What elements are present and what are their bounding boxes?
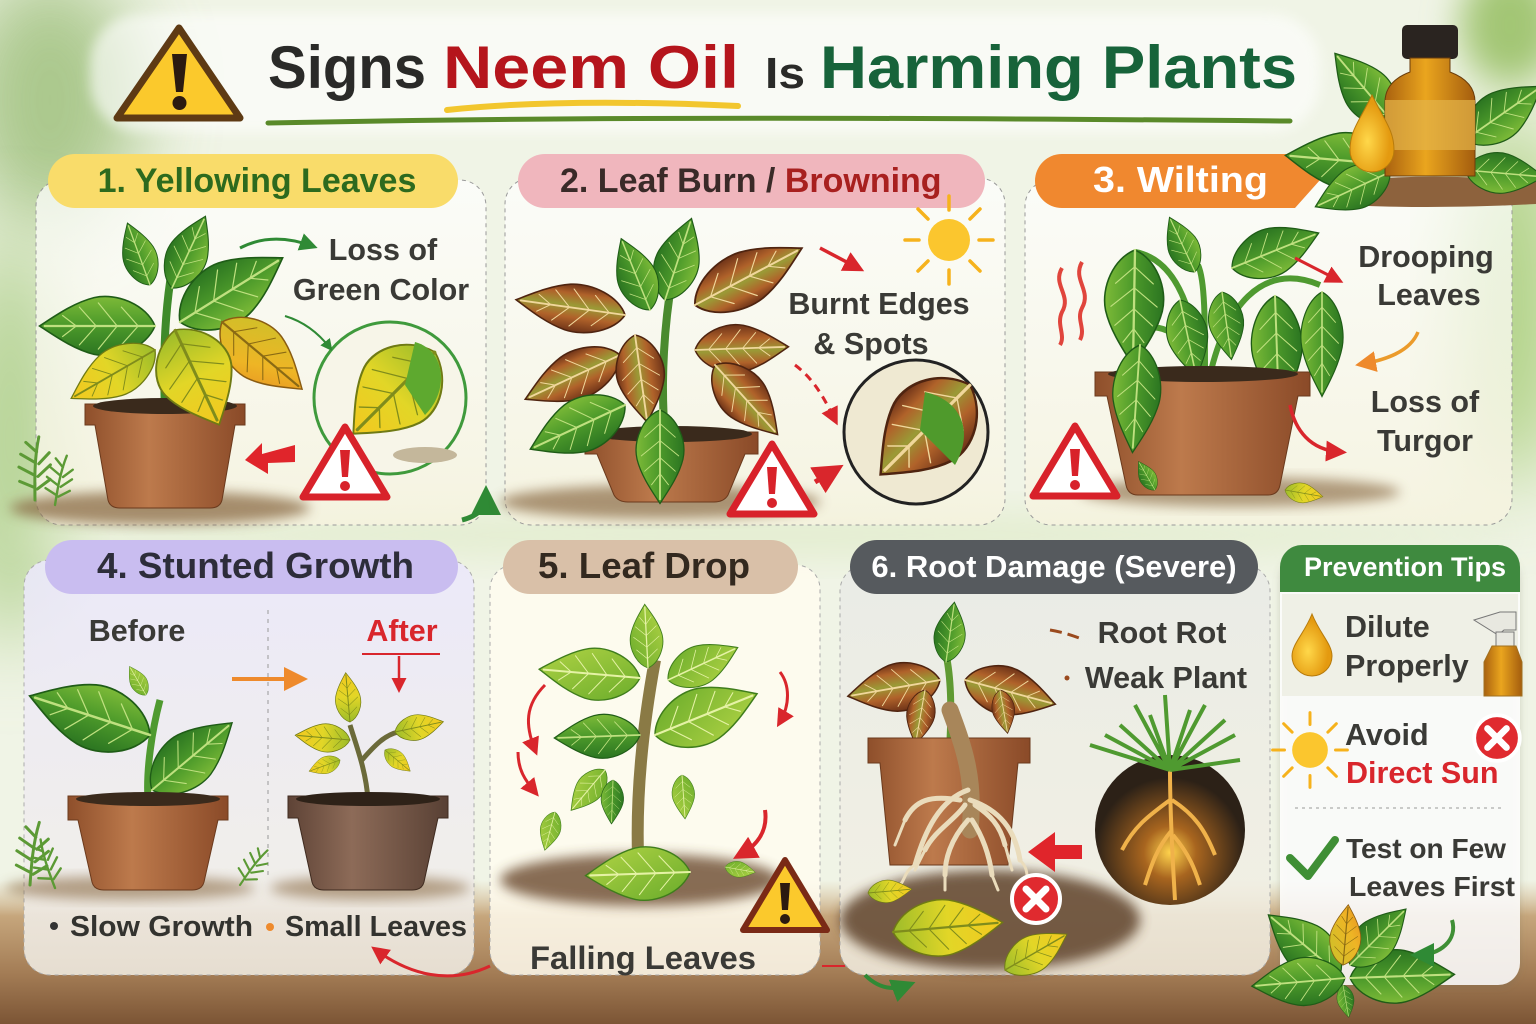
heading	[48, 154, 458, 208]
small plant	[1250, 895, 1455, 1019]
plant in pot	[10, 208, 320, 525]
arrow	[376, 950, 490, 976]
tip: dilute: Properly	[1345, 649, 1469, 683]
icon: spray bottle	[1474, 612, 1522, 696]
title text: Signs	[268, 34, 426, 101]
soil ground	[840, 870, 1140, 970]
plant	[500, 603, 780, 906]
heading	[518, 154, 985, 208]
card	[1280, 555, 1520, 985]
title text: Is	[765, 49, 805, 98]
arrows: falling	[518, 672, 788, 855]
label: Leaves	[1377, 278, 1481, 312]
label	[1358, 240, 1494, 312]
tip: test: Leaves First	[1349, 871, 1515, 902]
card	[24, 560, 474, 975]
panel 4: stunted growth	[5, 540, 490, 976]
heading: 6. Root Damage (Severe)	[871, 549, 1237, 584]
label: Root Rot	[1098, 616, 1226, 650]
icon: warning	[1033, 426, 1117, 496]
icon: wavy lines	[1059, 262, 1085, 345]
tip: test: Test on Few	[1346, 833, 1506, 864]
fallen leaves	[867, 878, 1076, 986]
heading: 1. Yellowing Leaves	[98, 162, 416, 200]
label: Loss of	[1371, 385, 1480, 419]
inset: burnt leaf	[844, 355, 1000, 504]
panel 6: root damage	[840, 540, 1270, 988]
label: Turgor	[1377, 424, 1473, 458]
label	[788, 287, 970, 361]
label: Falling Leaves	[530, 940, 756, 976]
heading	[850, 540, 1258, 594]
panel 5: leaf drop	[490, 540, 845, 976]
tip: avoid sun: Direct Sun	[1346, 756, 1499, 790]
bullet labels: Slow Growth	[70, 911, 253, 943]
arrow	[362, 654, 440, 688]
title text: Harming Plants	[820, 34, 1297, 101]
healthy plant	[5, 662, 271, 900]
icon: neem oil bottle and leaves	[1283, 25, 1536, 226]
label	[1050, 616, 1247, 695]
label: after: After	[366, 614, 438, 648]
icon: x	[1012, 875, 1060, 923]
arrow	[1290, 405, 1340, 452]
tip: dilute: Dilute	[1345, 610, 1430, 644]
title banner	[90, 14, 1320, 132]
bullet labels	[50, 911, 467, 943]
card	[505, 178, 1005, 525]
card	[490, 565, 820, 975]
label	[1371, 385, 1480, 458]
arrow	[820, 248, 858, 268]
arrow	[1028, 832, 1082, 872]
tip: avoid sun	[1273, 713, 1520, 790]
connector	[822, 965, 845, 967]
panel 2: leaf burn	[500, 154, 1005, 525]
heading	[45, 540, 458, 594]
arrow	[232, 677, 300, 681]
icon: warning triangle	[117, 28, 240, 118]
heading: 2. Leaf Burn / Browning	[560, 162, 942, 200]
heading	[503, 540, 798, 594]
bullet labels: Small Leaves	[285, 911, 467, 943]
icon: sun	[905, 196, 993, 284]
heading	[1280, 545, 1520, 592]
arrow: loss of color	[240, 239, 312, 248]
inset: soil circle with roots	[1090, 695, 1245, 905]
plant in pot	[1080, 211, 1400, 507]
arrow	[815, 470, 835, 482]
arrow	[1362, 332, 1418, 364]
card	[1025, 180, 1512, 525]
panel 1: yellowing leaves	[10, 154, 486, 525]
title text	[268, 34, 1297, 101]
tip: avoid sun: Avoid	[1345, 718, 1429, 752]
label: Green Color	[293, 273, 469, 307]
plant in pot	[500, 212, 820, 519]
label: Loss of	[329, 233, 438, 267]
icon: warning	[303, 427, 387, 497]
label: Weak Plant	[1085, 661, 1247, 695]
arrow: green corner	[462, 495, 486, 520]
plant with exposed roots	[844, 600, 1062, 890]
icon: warning	[730, 444, 814, 514]
label: before: Before	[89, 614, 185, 648]
label	[293, 233, 469, 307]
stunted plant	[270, 672, 470, 900]
heading: 5. Leaf Drop	[538, 545, 750, 586]
card	[36, 180, 486, 525]
heading: Prevention Tips	[1304, 552, 1506, 582]
heading: 4. Stunted Growth	[97, 545, 414, 586]
label: & Spots	[813, 327, 929, 361]
tip: test	[1290, 833, 1515, 902]
arrow: red	[245, 443, 295, 474]
panel: prevention tips	[1250, 545, 1522, 1019]
heading: 3. Wilting	[1093, 159, 1268, 200]
heading	[1035, 154, 1320, 208]
label: Burnt Edges	[788, 287, 970, 321]
panel 3: wilting	[1025, 154, 1512, 525]
icon: warning	[743, 860, 827, 930]
card	[840, 565, 1270, 975]
label: Drooping	[1358, 240, 1494, 274]
inset: yellow leaf	[314, 322, 466, 474]
arrow	[1418, 920, 1453, 955]
tip: dilute	[1282, 594, 1522, 696]
arrow	[865, 975, 908, 988]
title text: Neem Oil	[443, 34, 739, 101]
arrow	[1295, 258, 1338, 280]
